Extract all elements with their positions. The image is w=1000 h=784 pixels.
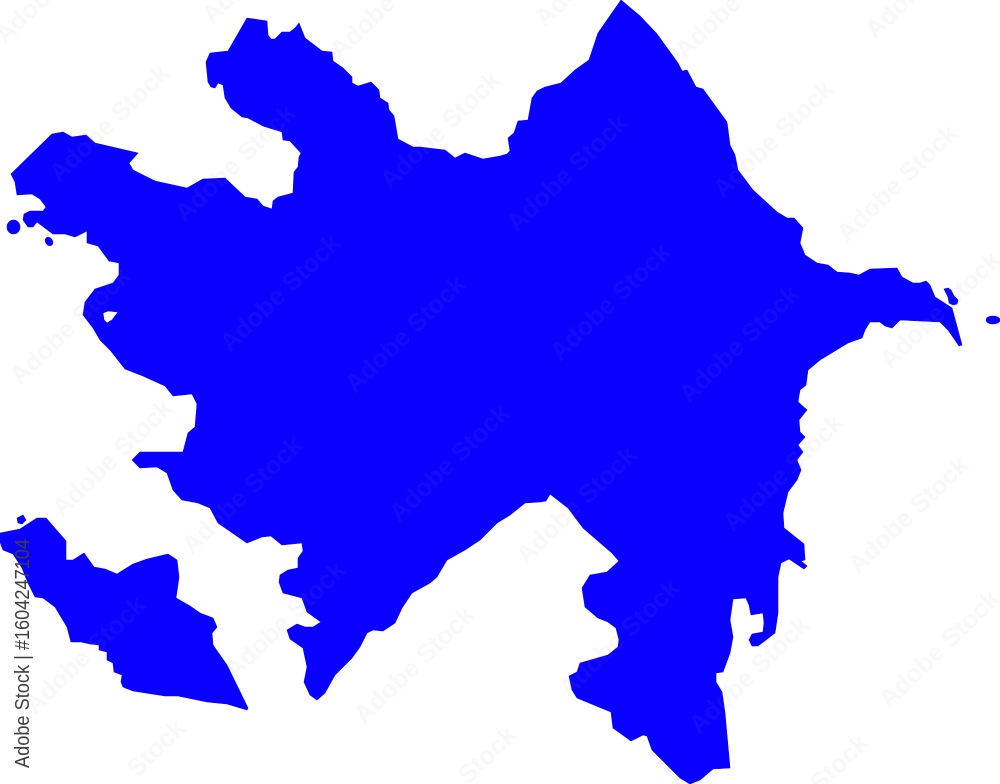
watermark: repeated Adobe Stock pattern: Adobe Stock <box>708 74 840 203</box>
watermark: repeated Adobe Stock pattern: Adobe Stock <box>545 237 677 366</box>
watermark: repeated Adobe Stock pattern: Adobe Stock <box>554 573 686 702</box>
watermark: repeated Adobe Stock pattern: Adobe Stock <box>843 450 975 579</box>
watermark: repeated Adobe Stock pattern: Stock <box>122 714 192 783</box>
watermark: repeated Adobe Stock pattern: Adobe Stock <box>5 261 137 390</box>
vertical credit text: Adobe Stock | #1604247104 <box>12 539 34 768</box>
islets <box>17 515 26 524</box>
watermark: repeated Adobe Stock pattern: Adobe Stock <box>349 600 481 729</box>
watermark: repeated Adobe Stock pattern: Adobe Stock <box>511 440 643 569</box>
watermark: repeated Adobe Stock pattern: Adobe Stock <box>177 430 309 559</box>
watermark: repeated Adobe Stock pattern: Adobe Stock <box>340 269 472 398</box>
watermark: repeated Adobe Stock pattern: Adobe Stock <box>170 98 302 227</box>
watermark: repeated Adobe Stock pattern: Adobe Stock <box>220 555 352 684</box>
watermark: repeated Adobe Stock pattern: Adobe Stock <box>375 65 507 194</box>
watermark: repeated Adobe Stock pattern: Adobe Stock <box>674 279 806 408</box>
watermark: repeated Adobe Stock pattern: Adobe Stock <box>684 610 816 739</box>
watermark: repeated Adobe Stock pattern: Adobe Stock <box>384 398 516 527</box>
watermark: repeated Adobe Stock pattern: Adobe Stock <box>832 118 964 247</box>
watermark: repeated Adobe Stock pattern: Adobe Stock <box>44 58 176 187</box>
Nakhchivan exclave <box>0 518 248 710</box>
watermark: repeated Adobe Stock pattern: Adobe Stock <box>20 590 152 719</box>
watermark: repeated Adobe Stock pattern: Adobe Stock <box>718 408 850 537</box>
watermark: repeated Adobe Stock pattern: Adobe Stock <box>215 228 347 357</box>
watermark: repeated Adobe Stock pattern: Adobe Stock <box>47 393 179 522</box>
watermark: repeated Adobe Stock pattern: Adobe Stock <box>502 108 634 237</box>
